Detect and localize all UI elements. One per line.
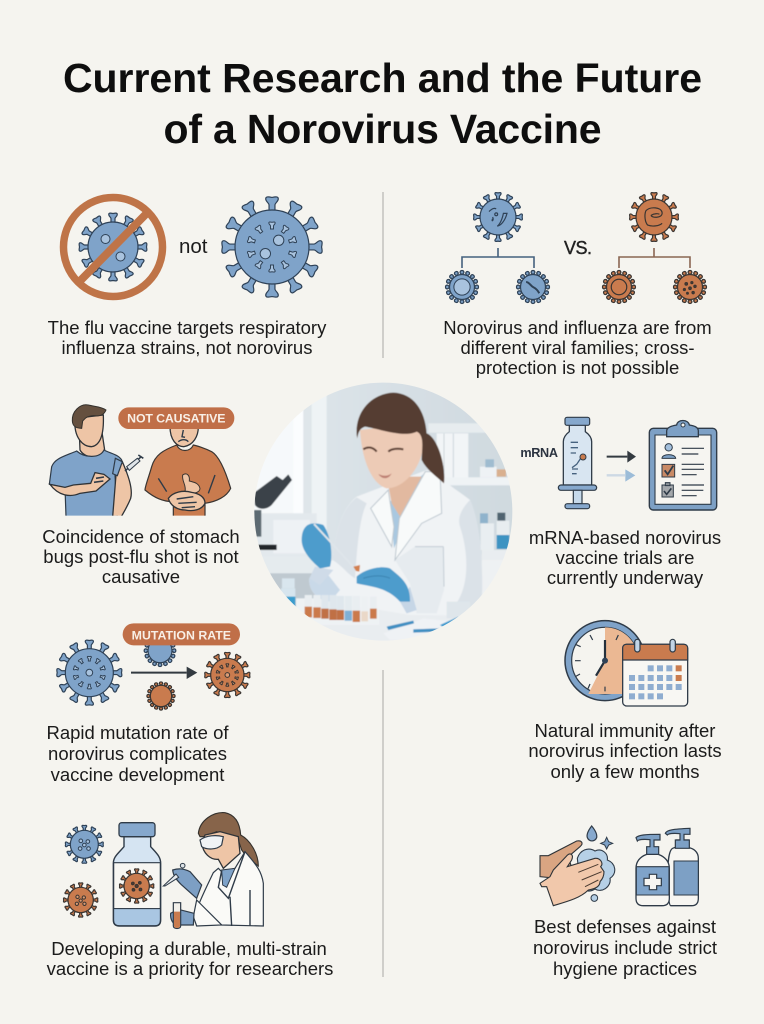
text: mRNA trials: currently underway (547, 567, 704, 588)
panel: natural immunity (528, 621, 722, 782)
icon: influenza family tree (602, 193, 706, 304)
text: hygiene: hygiene practices (553, 958, 697, 979)
photo: scientist in laboratory (250, 377, 517, 650)
panel: coincidence not causative (42, 405, 240, 587)
text: natural immunity: Natural immunity after (535, 720, 715, 741)
title: Current Research and the Future (63, 55, 702, 101)
panel: viral families (443, 193, 712, 378)
text: coincidence: Coincidence of stomach (42, 526, 240, 547)
label: mRNA: mRNA (520, 446, 558, 460)
calendar (623, 639, 688, 706)
clipboard (649, 420, 717, 510)
badge: not causative: NOT CAUSATIVE (127, 412, 225, 426)
text: coincidence: bugs post-flu shot is not (43, 546, 239, 567)
badge: mutation rate (123, 623, 240, 645)
researcher (163, 813, 263, 928)
badge: mutation rate: MUTATION RATE (132, 628, 231, 642)
panel: flu vaccine target (48, 197, 327, 358)
text: mutation rate: vaccine development (51, 764, 224, 785)
text: viral families: protection is not possible (476, 357, 679, 378)
panel: mRNA trials (520, 417, 721, 588)
label: not: not (179, 235, 208, 258)
icon: norovirus family tree (446, 193, 550, 304)
arrow: dark (607, 451, 636, 463)
clock (565, 621, 645, 701)
text: mRNA trials: mRNA-based norovirus (529, 527, 721, 548)
text: mRNA trials: vaccine trials are (556, 547, 694, 568)
title: of a Norovirus Vaccine (164, 106, 602, 152)
icon: virus mutating (57, 623, 250, 710)
icon: clock and calendar (565, 621, 688, 706)
icon: norovirus (222, 197, 322, 297)
icon: vaccinated man and sick person (49, 405, 234, 517)
text: flu vaccine: influenza strains, not norovirus (62, 337, 312, 358)
text: mutation rate: norovirus complicates (48, 743, 227, 764)
text: coincidence: causative (102, 566, 180, 587)
text: mutation rate: Rapid mutation rate of (46, 722, 229, 743)
text: natural immunity: norovirus infection lasts (528, 740, 722, 761)
text: multi-strain: Developing a durable, multi-strain (51, 938, 327, 959)
icon: crossed out influenza virus (64, 198, 162, 296)
panel: mutation rate (46, 623, 250, 785)
icon: washing hands and soap bottles (540, 826, 698, 906)
soap foam and drops (577, 826, 615, 901)
panel: multi-strain vaccine (47, 813, 333, 979)
hands (540, 841, 604, 906)
text: viral families: different viral families; cross- (460, 337, 695, 358)
label: vs.: VS. (564, 238, 592, 258)
text: natural immunity: only a few months (550, 761, 700, 782)
syringe vial (558, 417, 597, 509)
pump bottles (636, 828, 698, 906)
arrow (131, 672, 187, 674)
icon: vaccine vial and researcher (64, 813, 263, 928)
man receiving flu shot (49, 405, 143, 517)
text: hygiene: norovirus include strict (533, 937, 717, 958)
vial (113, 823, 161, 926)
badge: not causative (118, 407, 234, 429)
text: multi-strain: vaccine is a priority for researchers (47, 958, 333, 979)
coat (324, 470, 470, 604)
text: viral families: Norovirus and influenza are from (443, 317, 712, 338)
panel: hygiene (533, 826, 717, 979)
sick person holding stomach (145, 427, 231, 517)
icon: mRNA syringe to clipboard (520, 417, 717, 510)
text: hygiene: Best defenses against (534, 916, 716, 937)
text: flu vaccine: The flu vaccine targets respiratory (48, 317, 327, 338)
arrow: faded (607, 469, 635, 482)
